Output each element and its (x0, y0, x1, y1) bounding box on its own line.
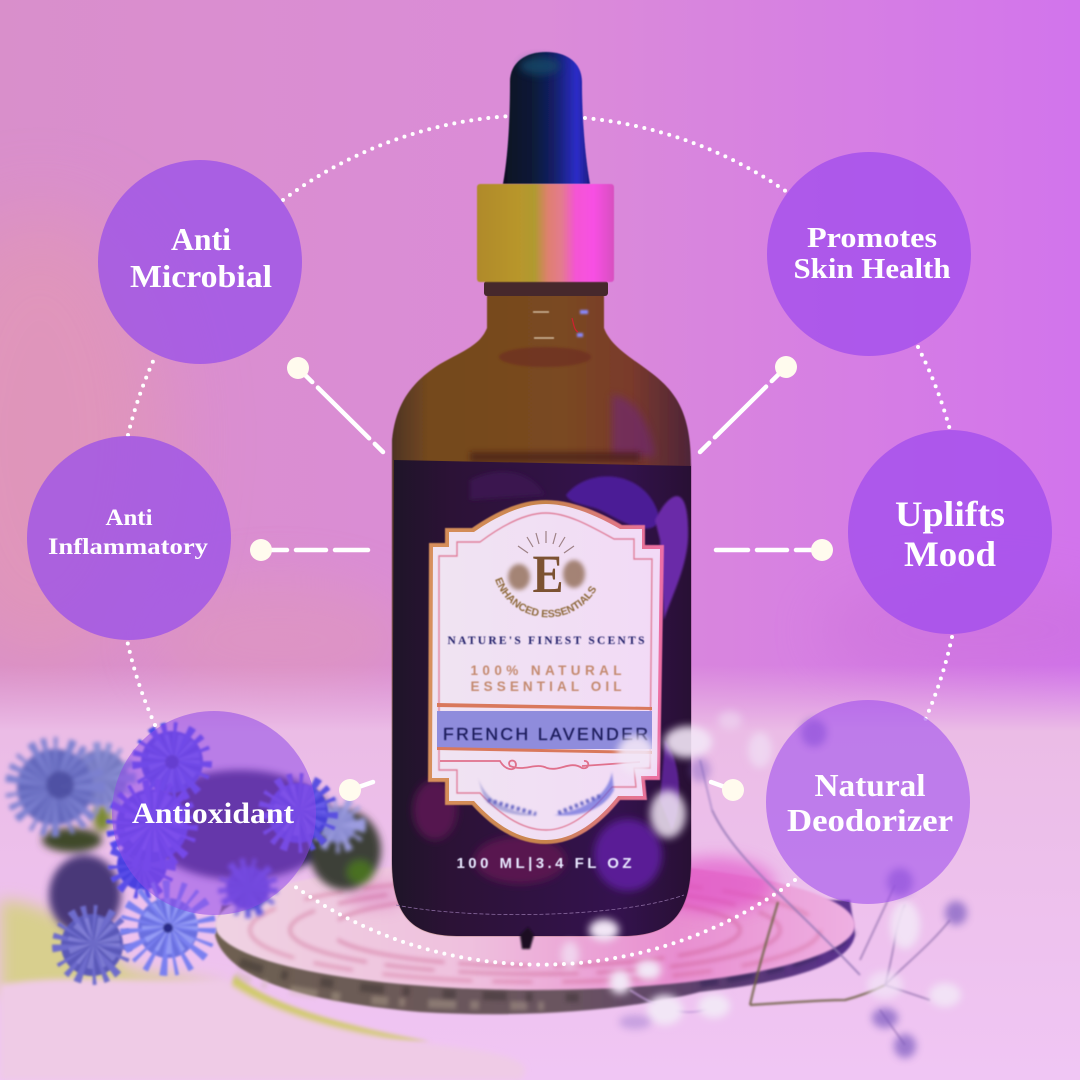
label foil shape (428, 500, 664, 844)
connector: anti microbial (287, 357, 383, 452)
baby's breath sprigs (561, 711, 967, 1058)
wooden coaster (215, 857, 855, 1014)
benefit: natural deodorizer (766, 700, 970, 904)
product bottle (391, 51, 692, 951)
dark floral wrap (392, 460, 691, 949)
benefit: promotes skin health: Skin Health (794, 254, 951, 285)
benefit: natural deodorizer: Deodorizer (787, 802, 953, 838)
flower head: top blue (141, 731, 203, 793)
coaster growth rings (250, 878, 820, 982)
flower head: lower dusty (61, 914, 123, 976)
flower head: right (268, 783, 328, 843)
label claim line one: 100% NATURAL (470, 663, 622, 678)
background: fabric table surface (0, 665, 1080, 1080)
connector: anti inflammatory (250, 539, 368, 561)
benefit: antioxidant: Antioxidant (132, 797, 294, 830)
label tagline: NATURE'S FINEST SCENTS (448, 635, 644, 647)
flower head: lower bright (138, 898, 198, 958)
brand logo: E (532, 544, 564, 604)
inner foil border (439, 513, 652, 830)
coaster top surface (215, 860, 855, 990)
flower head: pale right-side sprig (320, 807, 356, 843)
flower head: middle blue (116, 789, 188, 890)
benefit: anti microbial: Microbial (130, 258, 272, 294)
flower head: pale left (17, 749, 128, 825)
dotted ring linking the benefit circles (127, 116, 952, 965)
connector: uplifts mood (716, 539, 833, 561)
connector: promotes skin health (700, 356, 797, 452)
benefit: natural deodorizer: Natural (814, 767, 926, 803)
benefit: antioxidant (112, 711, 316, 915)
label claim line two: ESSENTIAL OIL (470, 679, 622, 694)
glass reflection (612, 395, 655, 456)
bottle glass body (392, 290, 691, 936)
benefit: anti inflammatory: Anti (106, 505, 153, 530)
benefit: uplifts mood: Mood (904, 534, 996, 574)
benefit: anti microbial (98, 160, 302, 364)
benefit: uplifts mood: Uplifts (895, 494, 1005, 534)
label paper (432, 504, 660, 840)
bottle label (427, 499, 665, 845)
benefit: anti microbial: Anti (171, 221, 231, 257)
blurred blossoms (561, 711, 961, 1025)
benefit: uplifts mood (848, 430, 1052, 634)
brand logo (494, 531, 596, 618)
bottle neck detail (484, 281, 608, 367)
volume text: 100 ML|3.4 FL OZ (456, 855, 632, 872)
dark foliage (42, 770, 381, 935)
benefit: promotes skin health (767, 152, 971, 356)
stems (630, 760, 950, 1045)
product name band: FRENCH LAVENDER (443, 724, 648, 744)
brand logo: ENHANCED ESSENTIALS (494, 576, 596, 618)
bulb highlight (520, 57, 560, 75)
benefit: anti inflammatory: Inflammatory (48, 534, 209, 559)
blue cornflower bouquet (17, 731, 381, 976)
flower head: lower centre (226, 866, 270, 910)
lavender sprigs illustration (478, 772, 614, 816)
dropper bulb (503, 52, 590, 184)
benefit: promotes skin health: Promotes (807, 223, 937, 254)
connector: antioxidant (339, 779, 373, 801)
product name band (437, 703, 652, 754)
blossom shadows (619, 719, 967, 1058)
gold and pink collar (477, 184, 614, 282)
coaster bark side (215, 900, 855, 1014)
scroll ornament (440, 761, 640, 769)
connector: natural deodorizer (711, 779, 744, 801)
benefit: anti inflammatory (27, 436, 231, 640)
